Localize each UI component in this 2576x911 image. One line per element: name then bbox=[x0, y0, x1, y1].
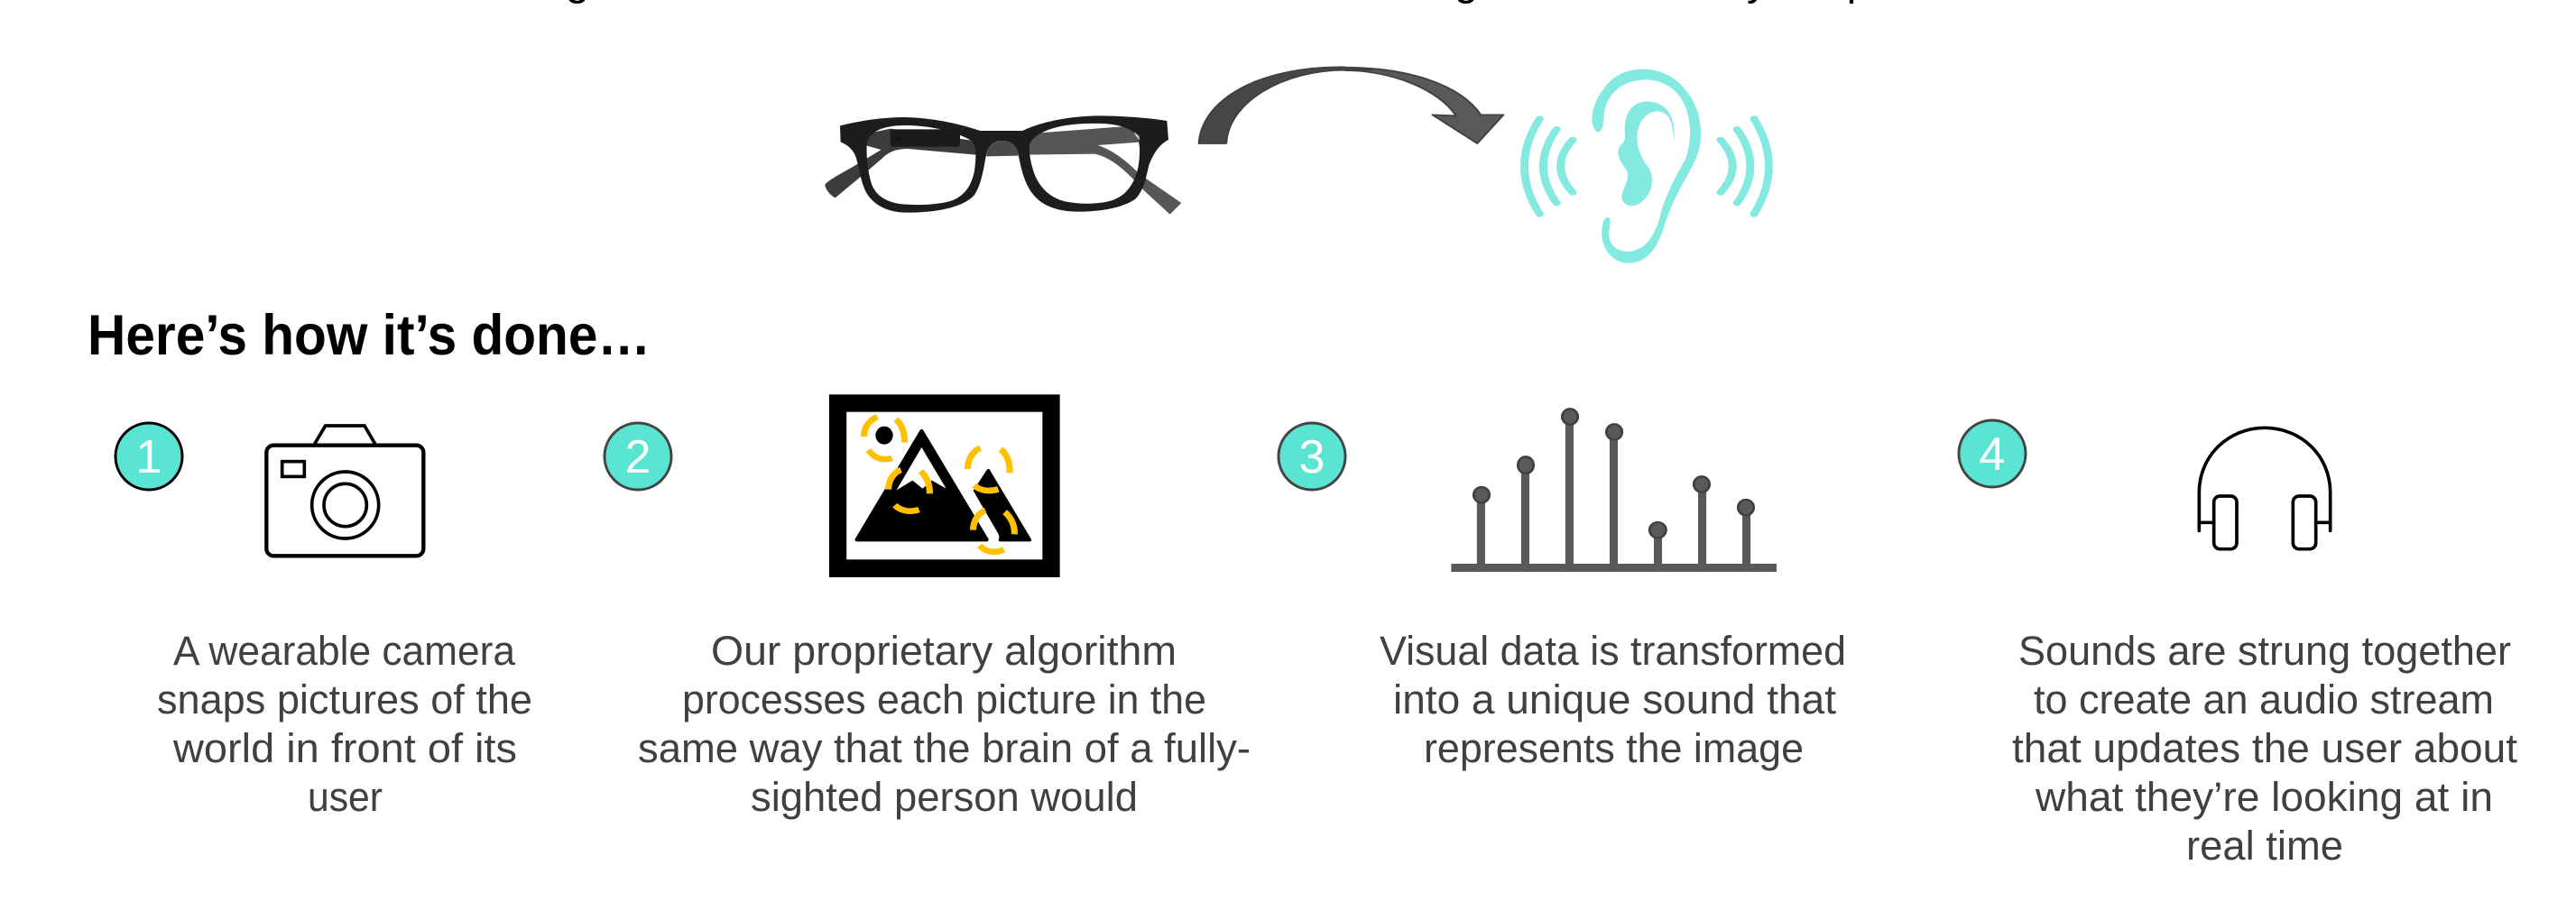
step 1 text bbox=[157, 628, 532, 820]
cropped title line at top edge bbox=[566, 0, 1870, 5]
icon: camera bbox=[266, 426, 423, 556]
step 2 text bbox=[638, 628, 1251, 820]
step 4 text bbox=[2012, 628, 2517, 869]
step 2 text: same way that the brain of a fully- bbox=[638, 725, 1251, 771]
step 1 number badge: 1 bbox=[136, 431, 162, 483]
arrow: glasses to ear bbox=[1199, 67, 1503, 143]
icon: glasses bbox=[825, 115, 1181, 215]
step 3 text: Visual data is transformed bbox=[1380, 628, 1846, 674]
step 1 text: user bbox=[308, 774, 383, 820]
icon: ear with sound waves bbox=[1524, 69, 1768, 263]
step 3 text: represents the image bbox=[1424, 725, 1804, 771]
step 1 number badge bbox=[115, 423, 182, 490]
step 2 text: Our proprietary algorithm bbox=[711, 628, 1177, 674]
step 1 text: A wearable camera bbox=[173, 628, 516, 674]
step 2 number badge: 2 bbox=[625, 431, 651, 483]
step 4 text: real time bbox=[2186, 823, 2343, 869]
step 2 text: sighted person would bbox=[751, 774, 1138, 820]
step 2 text: processes each picture in the bbox=[682, 676, 1206, 722]
icon: sound spectrum chart bbox=[1451, 409, 1777, 572]
step 4 text: to create an audio stream bbox=[2034, 676, 2494, 722]
step 3 text: into a unique sound that bbox=[1393, 676, 1837, 722]
step 1 text: world in front of its bbox=[172, 725, 517, 771]
step 4 number badge bbox=[1959, 420, 2026, 487]
icon: framed mountains picture with detection circles bbox=[829, 394, 1060, 577]
step 1 text: snaps pictures of the bbox=[157, 676, 532, 722]
step 4 text: what they’re looking at in bbox=[2035, 774, 2493, 820]
step 4 text: Sounds are strung together bbox=[2018, 628, 2511, 674]
step 3 number badge: 3 bbox=[1299, 431, 1325, 483]
heading: Here’s how it’s done… bbox=[88, 304, 651, 367]
step 3 number badge bbox=[1279, 423, 1345, 490]
step 4 text: that updates the user about bbox=[2012, 725, 2517, 771]
step 4 number badge: 4 bbox=[1980, 428, 2005, 481]
icon: headphones bbox=[2199, 428, 2331, 549]
step 3 text bbox=[1380, 628, 1846, 771]
step 2 number badge bbox=[605, 423, 671, 490]
sound waves left bbox=[1524, 119, 1539, 214]
